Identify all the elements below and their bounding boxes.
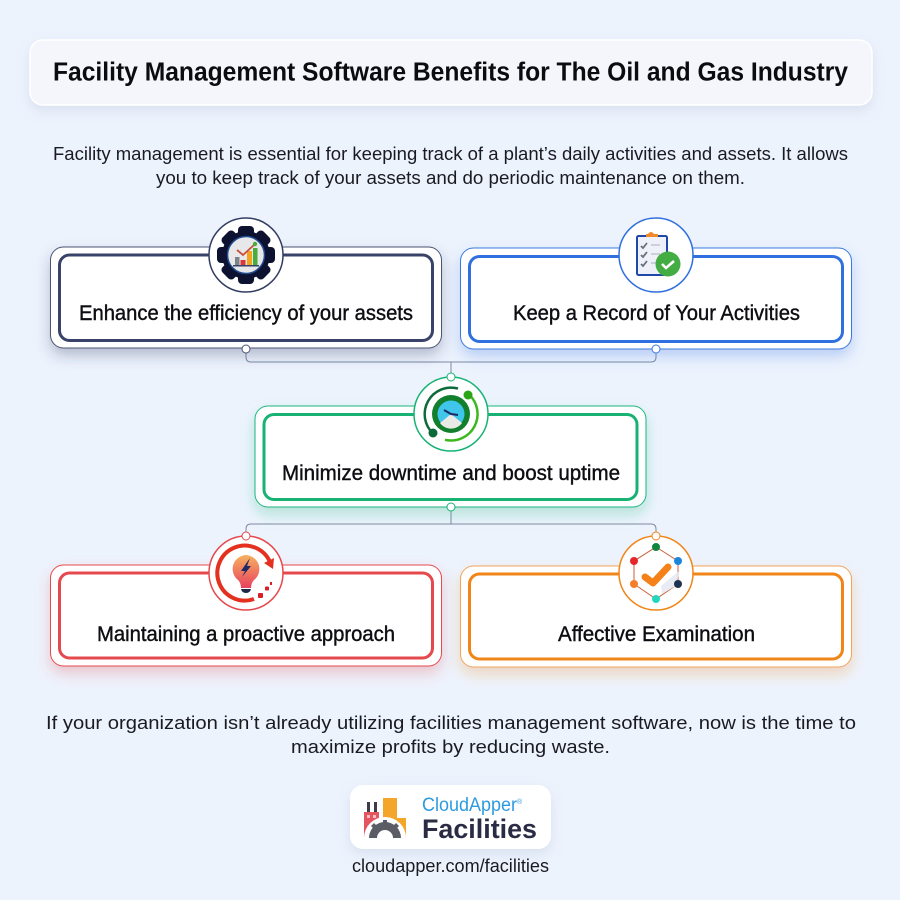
connector node: card 2 bottom xyxy=(652,345,660,353)
website url: cloudapper.com/facilities xyxy=(352,855,549,876)
closing paragraph: maximize profits by reducing waste. xyxy=(291,736,610,757)
icon: gear with chart xyxy=(209,218,283,292)
connector: middle card to bottom cards xyxy=(246,508,656,536)
product name: Facilities xyxy=(422,814,537,844)
brand name: CloudApper xyxy=(422,795,518,816)
closing paragraph: If your organization isn’t already utilizing facilities management software, now is the time to xyxy=(46,712,856,733)
label: Maintaining a proactive approach xyxy=(97,623,395,646)
connector node: card 1 bottom xyxy=(242,345,250,353)
label: Affective Examination xyxy=(558,623,755,646)
title: Facility Management Software Benefits for The Oil and Gas Industry xyxy=(53,58,849,86)
card: minimize downtime xyxy=(255,377,646,507)
connector node: card 3 top xyxy=(447,373,455,381)
icon: clock with orbit xyxy=(414,377,488,451)
card: proactive approach xyxy=(50,536,442,666)
card: keep a record xyxy=(460,218,852,349)
connector node: card 3 bottom xyxy=(447,503,455,511)
label: Keep a Record of Your Activities xyxy=(513,302,800,325)
icon: factory with gear xyxy=(364,798,406,838)
connector node: card 4 top xyxy=(242,532,250,540)
title panel xyxy=(30,40,872,105)
connector: top cards to middle card xyxy=(246,350,656,377)
connector node: card 5 top xyxy=(652,532,660,540)
card: affective examination xyxy=(460,536,852,667)
card: enhance efficiency xyxy=(50,218,442,348)
icon: light bulb xyxy=(209,536,283,610)
label: Minimize downtime and boost uptime xyxy=(282,462,620,485)
registered mark: ® xyxy=(517,798,523,806)
intro paragraph xyxy=(53,143,848,188)
icon: hexagon check xyxy=(619,536,693,610)
intro paragraph: you to keep track of your assets and do periodic maintenance on them. xyxy=(156,167,745,188)
closing paragraph xyxy=(46,712,856,757)
intro paragraph: Facility management is essential for keeping track of a plant’s daily activities and assets. It allows xyxy=(53,143,848,164)
logo panel xyxy=(350,785,551,849)
label: Enhance the efficiency of your assets xyxy=(79,302,413,325)
icon: checklist clipboard xyxy=(619,218,693,292)
